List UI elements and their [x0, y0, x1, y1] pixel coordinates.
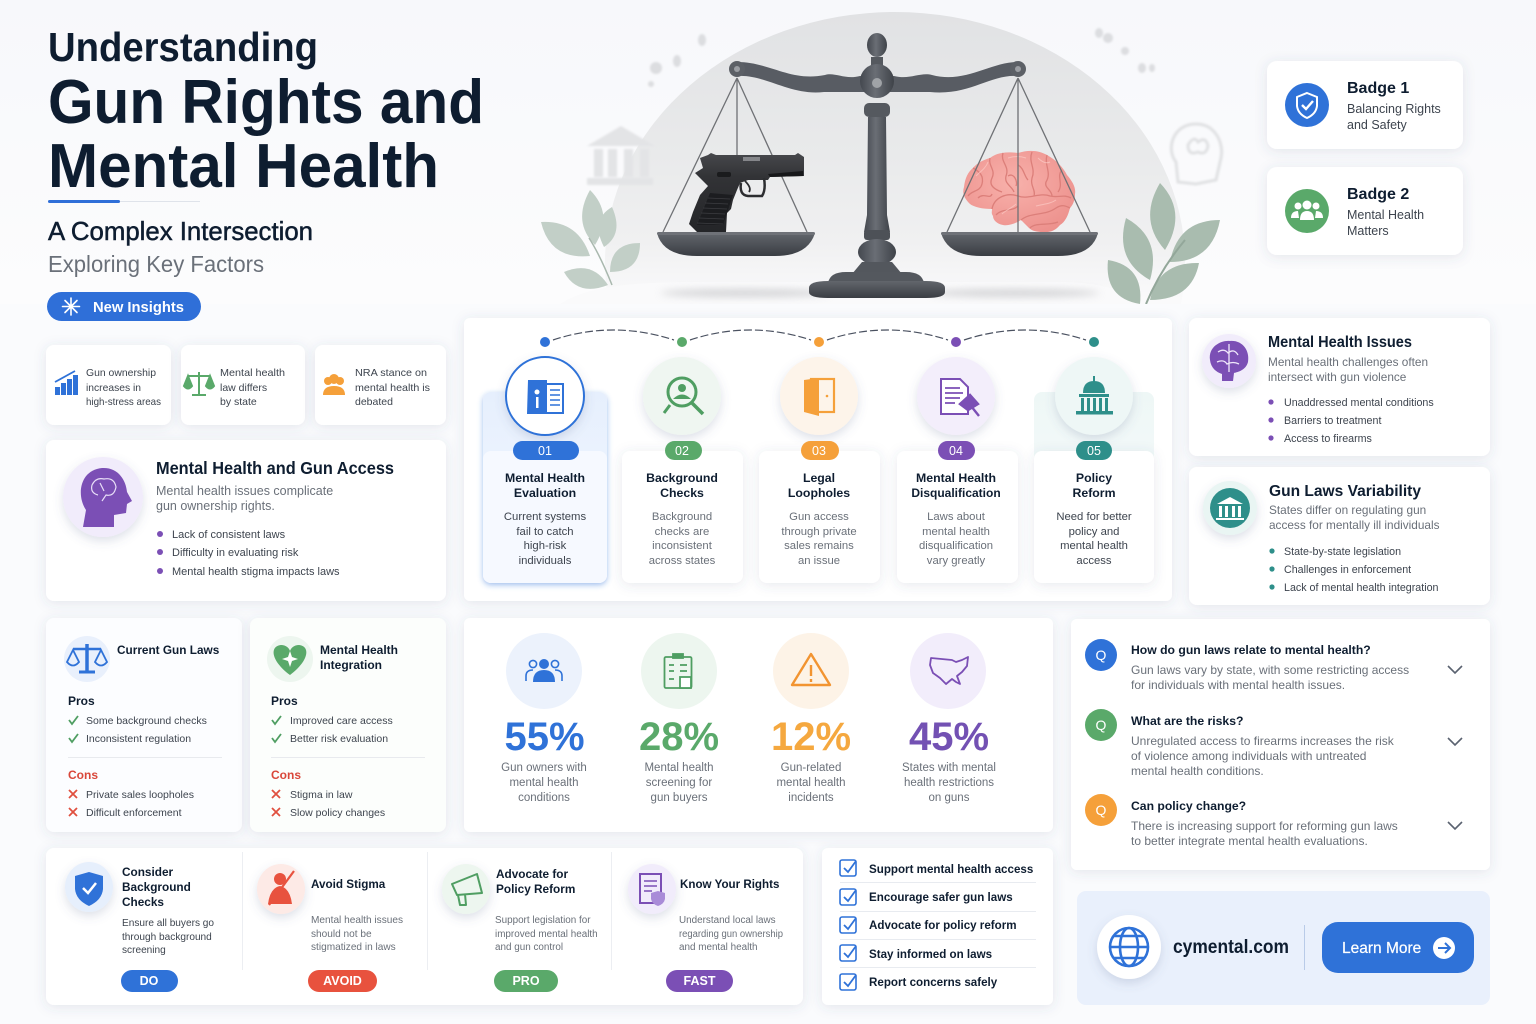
icon: door [804, 378, 834, 416]
icon: scale body [729, 33, 1026, 298]
step 2 [622, 337, 743, 583]
question 3: to better integrate mental health evaluations. [1131, 834, 1368, 848]
panel: current gun laws: Cons [68, 768, 98, 782]
title [48, 24, 484, 201]
stat: 28%: gun buyers [651, 792, 708, 804]
panel: mental health integration: Cons [271, 768, 301, 782]
tip: avoid stigma: Avoid Stigma [311, 878, 386, 891]
stat: 55% [501, 633, 587, 804]
icon: right plant [1108, 183, 1220, 304]
panel: call to action: cymental.com [1173, 937, 1289, 958]
question 1: Gun laws vary by state, with some restricting access [1131, 663, 1409, 677]
bullet list: Unaddressed mental conditions [1284, 397, 1434, 409]
question 2: What are the risks? [1131, 714, 1243, 728]
question 1: for individuals with mental health issues. [1131, 678, 1345, 692]
question 3 [1071, 787, 1490, 870]
icon: orange people [323, 374, 345, 395]
icon: document with shield [628, 864, 676, 914]
step 2: across states [649, 555, 716, 567]
step 2: checks are [655, 526, 709, 538]
tag: AVOID [308, 970, 377, 992]
icon: people group [526, 659, 562, 682]
check item 5 [840, 974, 998, 990]
pros list: Inconsistent regulation [86, 733, 191, 745]
step 5: policy and [1069, 526, 1119, 538]
step 5: 05 [1087, 444, 1101, 458]
stat: 28%: 28% [639, 715, 719, 759]
check item 3: Advocate for policy reform [869, 919, 1017, 932]
icon: faint courthouse [587, 126, 655, 185]
step 4: disqualification [919, 540, 993, 552]
panel: mental health integration: Integration [320, 658, 382, 672]
stat: 55%: mental health [509, 777, 579, 789]
question 3: Can policy change? [1131, 799, 1246, 813]
step 4: 04 [949, 444, 963, 458]
icon: purple head [63, 457, 143, 537]
question 1: How do gun laws relate to mental health? [1131, 643, 1371, 657]
question 2: Q [1096, 717, 1107, 733]
fact card: gun ownership: Gun ownership [86, 367, 156, 379]
step 1 [483, 337, 607, 583]
icon: bar chart [55, 371, 78, 395]
cons list: Difficult enforcement [86, 807, 182, 819]
fact card: gun ownership: high-stress areas [86, 396, 161, 408]
icon: megaphone [442, 864, 490, 914]
badge 2: Mental Health [1347, 208, 1424, 222]
bullet list: Mental health stigma impacts laws [172, 566, 340, 578]
question 2 [1071, 703, 1490, 787]
pros list: Some background checks [86, 715, 207, 727]
step 3: through private [781, 526, 857, 538]
step 2: 02 [675, 444, 689, 458]
panel: gun laws variability: access for mentally ill individuals [1269, 518, 1440, 532]
pros list [272, 715, 393, 745]
panel: mental health issues [1189, 318, 1490, 456]
tip: advocate: Support legislation for [495, 915, 591, 926]
cons list: Stigma in law [290, 789, 353, 801]
tag: FAST [666, 970, 733, 992]
icon: left pan [657, 232, 815, 256]
title: Mental Health [48, 132, 439, 201]
tip: advocate: and gun control [495, 942, 563, 953]
icon: capitol [1076, 376, 1113, 414]
panel: current gun laws [46, 618, 242, 832]
step 3: Legal [803, 471, 835, 485]
pros list: Improved care access [290, 715, 393, 727]
title underline [48, 200, 200, 203]
question 2: Unregulated access to firearms increases the risk [1131, 734, 1395, 748]
fact card: NRA: debated [355, 396, 393, 408]
step 5: access [1076, 555, 1112, 567]
badge 1: and Safety [1347, 118, 1408, 132]
step 5: mental health [1060, 540, 1128, 552]
step 5 [1034, 337, 1154, 583]
icon: purple brain [1202, 334, 1256, 388]
stat: 12% [771, 633, 851, 804]
icon: right pan [941, 232, 1098, 256]
question 1: Q [1096, 647, 1107, 663]
fact card: NRA: NRA stance on [355, 367, 427, 379]
tip: avoid stigma: Mental health issues [311, 915, 403, 926]
dashed connector [553, 330, 1086, 340]
step 4: mental health [922, 526, 990, 538]
stat: 12%: Gun-related [781, 762, 841, 774]
question 2: mental health conditions. [1131, 764, 1264, 778]
icon: faint head outline [1171, 124, 1222, 184]
step 1: Current systems [504, 511, 586, 523]
panel: FAQ [1071, 619, 1490, 870]
stat: 45%: on guns [929, 792, 970, 804]
step 1: 01 [538, 444, 552, 458]
pill: new insights: New Insights [93, 300, 184, 316]
tip: know your rights [628, 864, 783, 992]
step 1: Mental Health [505, 471, 585, 485]
bullet list: Access to firearms [1284, 433, 1372, 445]
stat: 12%: mental health [776, 777, 846, 789]
icon: people [1285, 189, 1329, 233]
icon: shield [1285, 83, 1329, 127]
check item 1: Support mental health access [869, 863, 1033, 876]
stat: 45%: States with mental [902, 762, 996, 774]
tip: background checks [65, 862, 214, 992]
bullet list: Lack of mental health integration [1284, 582, 1439, 594]
button: learn more [1322, 922, 1474, 973]
stat: 45%: health restrictions [904, 777, 994, 789]
tag: FAST: FAST [684, 974, 716, 988]
check item 2 [840, 889, 1013, 905]
stat: 55%: conditions [518, 792, 570, 804]
tip: background checks: Ensure all buyers go [122, 918, 214, 929]
cons list: Private sales loopholes [86, 789, 194, 801]
badge 2: Matters [1347, 224, 1389, 238]
bullet list: Lack of consistent laws [172, 529, 286, 541]
panel: process timeline [464, 318, 1172, 601]
fact card: state law: law differs [220, 382, 267, 394]
tag: DO: DO [140, 974, 159, 988]
icon: warning triangle [792, 654, 830, 685]
panel: current gun laws: Pros [68, 694, 95, 708]
step 5: Reform [1072, 486, 1116, 500]
icon: evaluation form [527, 380, 563, 414]
tip: advocate: improved mental health [495, 929, 598, 940]
step 3: an issue [798, 555, 840, 567]
tag: AVOID: AVOID [323, 974, 362, 988]
icon: handgun [689, 153, 804, 232]
tip: background checks: Background [122, 880, 191, 894]
tip: know your rights: Understand local laws [679, 915, 776, 926]
floor highlight [560, 282, 1150, 304]
panel: mental health issues: intersect with gun violence [1268, 370, 1407, 384]
question 1 [1071, 619, 1490, 703]
panel: mental health issues: Mental Health Issues [1268, 334, 1412, 351]
step 2: Background [646, 471, 718, 485]
step 3 [759, 337, 880, 583]
tip: know your rights: Know Your Rights [680, 878, 779, 891]
step 2: Background [652, 511, 712, 523]
tip: avoid stigma [257, 864, 403, 992]
hero illustration: scales balancing gun and brain [541, 12, 1224, 304]
tag: DO [121, 970, 178, 992]
step 3: 03 [812, 444, 826, 458]
stat: 28%: screening for [646, 777, 712, 789]
icon: small scales [184, 372, 214, 395]
title: Gun Rights and [48, 68, 484, 137]
icon: document and gavel [941, 379, 979, 416]
cons list [69, 789, 194, 819]
icon: teal courthouse [1203, 481, 1257, 535]
icon: magnifier [664, 378, 703, 414]
badge 1: Badge 1 [1347, 80, 1409, 97]
tagline: Exploring Key Factors [48, 251, 264, 277]
step 5: Policy [1076, 471, 1112, 485]
stat: 12%: incidents [788, 792, 834, 804]
step 3: sales remains [784, 540, 854, 552]
panel: gun laws variability [1189, 467, 1490, 605]
icon: green heart [267, 636, 313, 682]
question 3: There is increasing support for reforming gun laws [1131, 819, 1398, 833]
step 4: Mental Health [916, 471, 996, 485]
pros list [69, 715, 207, 745]
stat: 28% [639, 633, 719, 804]
badge 1: Balancing Rights [1347, 102, 1441, 116]
fact card: state law [181, 345, 305, 425]
tip: background checks: Checks [122, 895, 164, 909]
panel: mental health and gun access: Mental health issues complicate [156, 484, 333, 498]
panel: mental health and gun access: Mental Health and Gun Access [156, 458, 394, 478]
badge 1 [1267, 61, 1463, 149]
panel: gun laws variability: States differ on regulating gun [1269, 503, 1426, 517]
stat: 55%: 55% [504, 715, 585, 759]
step 4: vary greatly [927, 555, 986, 567]
cons list [272, 789, 385, 819]
icon: shield check [65, 862, 113, 912]
check item 1 [840, 860, 1033, 876]
bullet list [1269, 546, 1439, 594]
cons list: Slow policy changes [290, 807, 385, 819]
button: learn more: Learn More [1342, 940, 1421, 957]
tag: PRO: PRO [512, 974, 540, 988]
fact card: gun ownership: increases in [86, 382, 141, 394]
tip: know your rights: and mental health [679, 942, 758, 953]
step 1: fail to catch [516, 526, 574, 538]
question 2: of violence among individuals with untreated [1131, 749, 1366, 763]
tip: advocate: Policy Reform [496, 882, 575, 896]
fact card: state law: Mental health [220, 367, 285, 379]
tip: advocate [442, 864, 598, 992]
step 5: Need for better [1056, 511, 1132, 523]
panel: mental health and gun access [46, 440, 446, 601]
tag: PRO [494, 970, 558, 992]
stat: 45% [902, 633, 996, 804]
question 3: Q [1096, 802, 1107, 818]
panel: call to action [1077, 891, 1490, 1005]
panel: mental health integration [250, 618, 446, 832]
bullet list [1268, 397, 1434, 445]
check item 5: Report concerns safely [869, 976, 998, 989]
check item 4 [840, 945, 992, 961]
step 3: Gun access [789, 511, 849, 523]
fact card: gun ownership [46, 345, 171, 425]
pros list: Better risk evaluation [290, 733, 388, 745]
icon: globe [1097, 915, 1161, 979]
panel: current gun laws: Current Gun Laws [117, 643, 220, 657]
icon: brain [963, 151, 1075, 232]
panel: mental health and gun access: gun ownership rights. [156, 499, 275, 513]
tip: background checks: Consider [122, 865, 174, 879]
check item 2: Encourage safer gun laws [869, 891, 1013, 904]
stat: 12%: 12% [771, 715, 851, 759]
check item 4: Stay informed on laws [869, 948, 992, 961]
step 2: Checks [660, 486, 704, 500]
panel: gun laws variability: Gun Laws Variability [1269, 483, 1421, 500]
tip: background checks: screening [122, 945, 166, 956]
icon: left plant [541, 190, 640, 289]
step 2: inconsistent [652, 540, 713, 552]
tip: avoid stigma: stigmatized in laws [311, 942, 396, 953]
icon: clipboard [664, 654, 692, 688]
icon: blue scales [64, 636, 110, 682]
panel: mental health integration: Pros [271, 694, 298, 708]
step 4: Disqualification [911, 486, 1001, 500]
panel: checklist [822, 848, 1053, 1005]
fact card: state law: by state [220, 396, 257, 408]
step 3: Loopholes [788, 486, 850, 500]
badge 2 [1267, 167, 1463, 255]
check item 3 [840, 917, 1017, 933]
bullet list [157, 529, 340, 578]
tip: advocate: Advocate for [496, 867, 569, 881]
subtitle: A Complex Intersection [48, 216, 313, 246]
fact card: NRA [315, 345, 446, 425]
tip: background checks: through background [122, 932, 212, 943]
step 1: individuals [519, 555, 572, 567]
icon: US map [930, 657, 968, 684]
pill: new insights [47, 292, 201, 321]
floating dots [648, 28, 1155, 87]
icon: stigma figure [257, 864, 305, 914]
title: Understanding [48, 24, 318, 70]
step 4 [897, 337, 1018, 583]
badge 2: Badge 2 [1347, 186, 1409, 203]
scale strings [663, 78, 1090, 232]
panel: statistics [464, 618, 1053, 832]
bullet list: State-by-state legislation [1284, 546, 1401, 558]
bullet list: Challenges in enforcement [1284, 564, 1411, 576]
step 4: Laws about [927, 511, 986, 523]
stat: 45%: 45% [909, 715, 989, 759]
panel: mental health integration: Mental Health [320, 643, 398, 657]
panel: recommendations strip [46, 848, 803, 1005]
step 1: Evaluation [514, 486, 576, 500]
bullet list: Barriers to treatment [1284, 415, 1381, 427]
fact card: NRA: mental health is [355, 382, 430, 394]
stat: 28%: Mental health [644, 762, 714, 774]
stat: 55%: Gun owners with [501, 762, 587, 774]
bullet list: Difficulty in evaluating risk [172, 547, 299, 559]
panel: mental health issues: Mental health challenges often [1268, 355, 1428, 369]
tip: know your rights: regarding gun ownership [679, 929, 783, 940]
tip: avoid stigma: should not be [311, 929, 372, 940]
step 1: high-risk [524, 540, 567, 552]
